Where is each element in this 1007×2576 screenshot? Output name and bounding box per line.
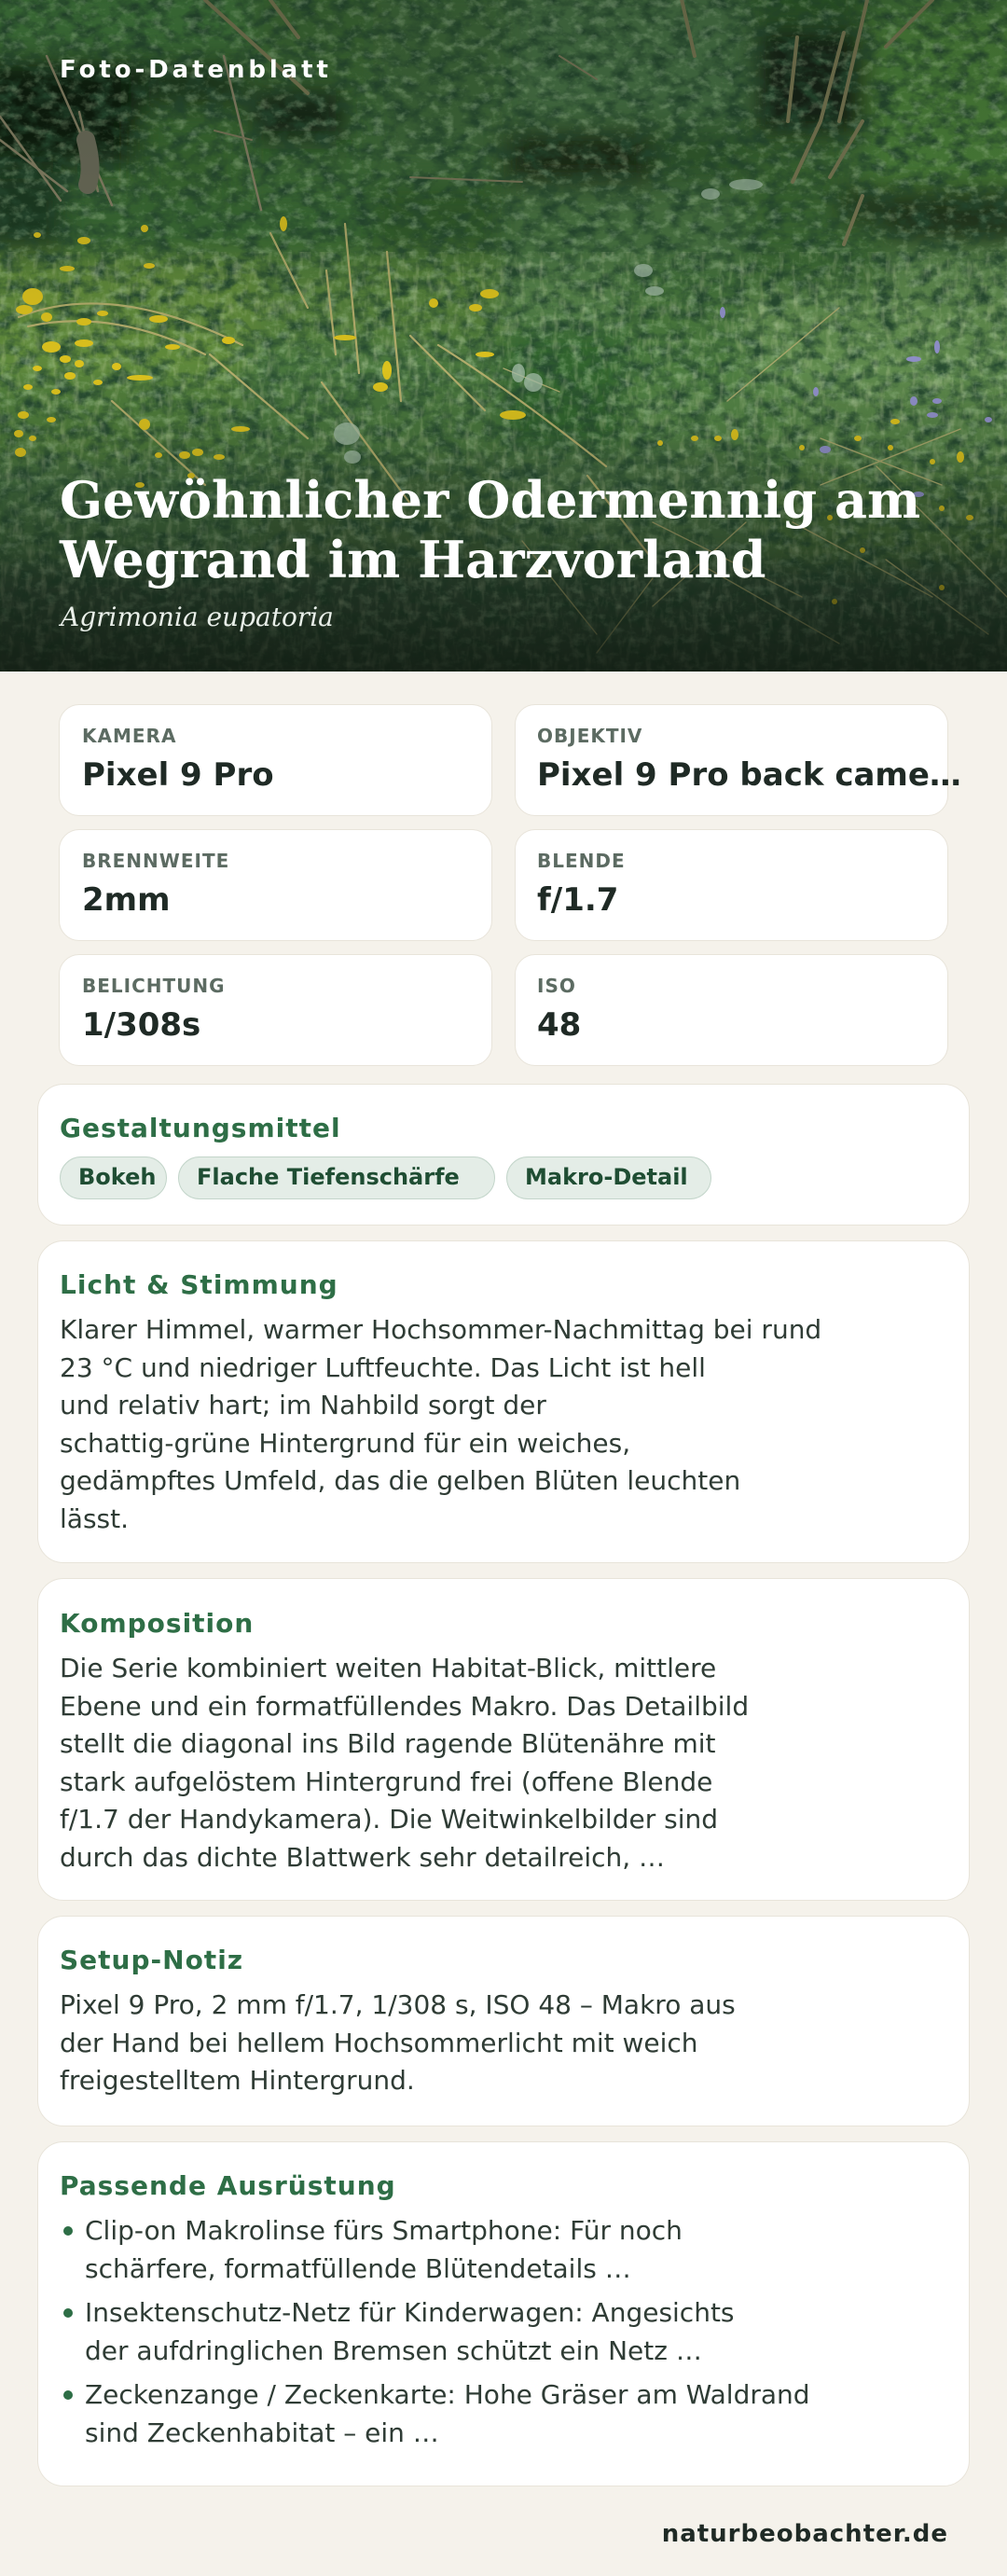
text: Clip-on Makrolinse: schärfere, formatfüllende Blütendetails …: [85, 2253, 631, 2284]
text: Licht & Stimmung: [60, 1314, 821, 1534]
chip: Makro-Detail: [506, 1156, 711, 1199]
text: Setup-Notiz: Pixel 9 Pro, 2 mm f/1.7, 1/308 s, ISO 48 – Makro aus: [60, 1989, 736, 2020]
text: Setup-Notiz: freigestelltem Hintergrund.: [60, 2065, 415, 2096]
text: Setup-Notiz: der Hand bei hellem Hochsommerlicht mit weich: [60, 2028, 698, 2058]
text: Komposition: [60, 1653, 749, 1873]
chip: Flache Tiefenschärfe: [178, 1156, 495, 1199]
hero photo: roadside meadow: [0, 0, 1007, 672]
heading: Komposition: Komposition: [60, 1608, 254, 1639]
text: Setup-Notiz: [60, 1989, 736, 2096]
stat card: Blende: f/1.7: [537, 881, 618, 919]
stat card: ISO: ISO: [537, 975, 576, 997]
text: Komposition: f/1.7 der Handykamera). Die Weitwinkelbilder sind: [60, 1804, 718, 1835]
yellow flowers: [14, 216, 973, 604]
overlay: dark gradient: [0, 0, 1007, 672]
heading: Gestaltungsmittel: Gestaltungsmittel: [60, 1113, 341, 1143]
text: Clip-on Makrolinse: Clip-on Makrolinse fürs Smartphone: Für noch: [85, 2215, 683, 2246]
text: Zeckenzange: [85, 2379, 810, 2448]
purple flowers: [720, 307, 992, 497]
stat card: Brennweite: 2mm: [82, 881, 171, 919]
stat card: Belichtung: [59, 954, 492, 1066]
stat card: Objektiv: Pixel 9 Pro back came…: [537, 756, 961, 794]
text: Komposition: stark aufgelöstem Hintergrund frei (offene Blende: [60, 1766, 712, 1797]
heading: Passende Ausrüstung: Passende Ausrüstung: [60, 2170, 396, 2201]
stat card: Blende: BLENDE: [537, 850, 626, 872]
text: Licht & Stimmung: lässt.: [60, 1503, 129, 1534]
label: Foto-Datenblatt: Foto-Datenblatt: [60, 56, 332, 84]
title: Gewöhnlicher Odermennig am: [60, 470, 920, 530]
text: Licht & Stimmung: schattig-grüne Hintergrund für ein weiches,: [60, 1428, 630, 1459]
pale leaves: [334, 179, 763, 464]
title: [60, 470, 920, 589]
panel: Setup-Notiz: [37, 1916, 970, 2126]
text: Licht & Stimmung: gedämpftes Umfeld, das die gelben Blüten leuchten: [60, 1465, 740, 1496]
title: Wegrand im Harzvorland: [60, 530, 766, 589]
stat card: ISO: [515, 954, 948, 1066]
chip: Bokeh: [60, 1156, 167, 1199]
stat card: ISO: 48: [537, 1006, 581, 1044]
text: Komposition: Ebene und ein formatfüllendes Makro. Das Detailbild: [60, 1691, 749, 1722]
heading: Setup-Notiz: Setup-Notiz: [60, 1945, 243, 1975]
text: Komposition: stellt die diagonal ins Bild ragende Blütenähre mit: [60, 1728, 716, 1759]
text: Insektenschutz-Netz: Insektenschutz-Netz für Kinderwagen: Angesichts: [85, 2297, 735, 2328]
stat card: Kamera: KAMERA: [82, 725, 176, 747]
bullet: Insektenschutz-Netz: [63, 2308, 73, 2318]
stat card: Belichtung: BELICHTUNG: [82, 975, 226, 997]
panel: Passende Ausrüstung: [37, 2141, 970, 2486]
text: Clip-on Makrolinse: [85, 2215, 683, 2284]
stat card: Brennweite: [59, 829, 492, 941]
bullet: Zeckenzange: [63, 2390, 73, 2400]
chip: Makro-Detail: Makro-Detail: [525, 1164, 688, 1190]
panel: Komposition: [37, 1578, 970, 1901]
stat card: Brennweite: BRENNWEITE: [82, 850, 229, 872]
stat card: Objektiv: OBJEKTIV: [537, 725, 642, 747]
stat card: Kamera: Pixel 9 Pro: [82, 756, 274, 794]
text: Zeckenzange: sind Zeckenhabitat – ein …: [85, 2417, 439, 2448]
text: Licht & Stimmung: und relativ hart; im Nahbild sorgt der: [60, 1390, 546, 1420]
text: Zeckenzange: Zeckenzange / Zeckenkarte: Hohe Gräser am Waldrand: [85, 2379, 810, 2410]
panel: Gestaltungsmittel: [37, 1084, 970, 1226]
chip: Bokeh: Bokeh: [78, 1164, 156, 1190]
text: Komposition: Die Serie kombiniert weiten Habitat-Blick, mittlere: [60, 1653, 716, 1683]
text: Licht & Stimmung: Klarer Himmel, warmer Hochsommer-Nachmittag bei rund: [60, 1314, 821, 1345]
text: Komposition: durch das dichte Blattwerk sehr detailreich, …: [60, 1842, 665, 1873]
branches and stems: [0, 0, 1007, 653]
stat card: Kamera: [59, 704, 492, 816]
bullet: Clip-on Makrolinse: [63, 2226, 73, 2236]
stat card: Belichtung: 1/308s: [82, 1006, 200, 1044]
text: Insektenschutz-Netz: der aufdringlichen Bremsen schützt ein Netz …: [85, 2335, 702, 2366]
subtitle: latin name: Agrimonia eupatoria: [61, 602, 334, 632]
text: Insektenschutz-Netz: [85, 2297, 735, 2366]
stat card: Objektiv: [515, 704, 948, 816]
stat card: Blende: [515, 829, 948, 941]
footer: brand: naturbeobachter.de: [662, 2520, 948, 2548]
chip: Flache Tiefenschärfe: Flache Tiefenschärfe: [197, 1164, 460, 1190]
panel: Licht & Stimmung: [37, 1240, 970, 1563]
heading: Licht & Stimmung: Licht & Stimmung: [60, 1269, 338, 1300]
text: Licht & Stimmung: 23 °C und niedriger Luftfeuchte. Das Licht ist hell: [60, 1352, 706, 1383]
